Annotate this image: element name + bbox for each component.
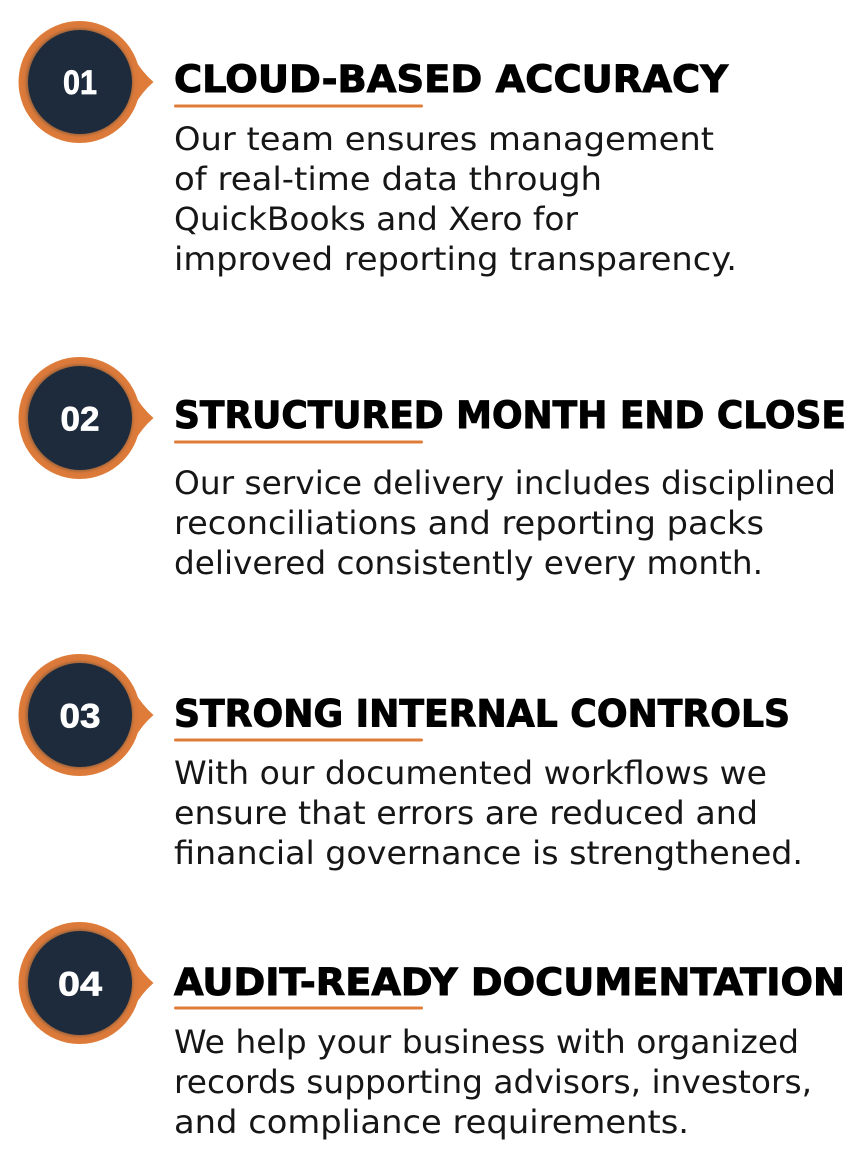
text block: description: financial governance is strengthened. [174,834,803,872]
text block: description: records supporting advisors, investors, [174,1063,812,1101]
heading: structured month end close: STRUCTURED MONTH END CLOSE [174,394,846,437]
panel: item 04 audit-ready documentation [18,922,845,1141]
text block: description [174,120,737,278]
text block: description [174,754,803,872]
text block: description: We help your business with organized [174,1023,799,1061]
heading underline [174,440,423,444]
text block: description: Our service delivery includes disciplined [174,464,836,502]
heading: cloud-based accuracy: CLOUD-BASED ACCURACY [174,58,729,101]
text block: description [174,1023,812,1141]
panel: item 03 strong internal controls [18,654,803,872]
text block: description: and compliance requirements. [174,1103,689,1141]
heading: audit-ready documentation: AUDIT-READY DOCUMENTATION [174,961,845,1004]
text block: description: QuickBooks and Xero for [174,200,579,238]
text block: description: delivered consistently every month. [174,544,763,582]
text block: description: Our team ensures management [174,120,714,158]
text block: description: improved reporting transparency. [174,240,737,278]
heading underline [174,1006,423,1010]
icon: number badge 02 [18,357,154,479]
text block: description: of real-time data through [174,160,602,198]
icon: number badge 01: 01 [63,64,97,102]
panel: item 01 cloud-based accuracy [18,21,737,278]
text block: description: reconciliations and reporting packs [174,504,764,542]
icon: number badge 03 [18,654,154,776]
heading underline [174,738,423,742]
heading: strong internal controls: STRONG INTERNAL CONTROLS [174,692,790,736]
panel: item 02 structured month end close [18,357,846,582]
text block: description: ensure that errors are reduced and [174,794,758,832]
text block: description: With our documented workflows we [174,754,767,792]
icon: number badge 03: 03 [60,698,100,736]
text block: description [174,464,836,582]
icon: number badge 01 [18,21,154,143]
icon: number badge 04 [18,922,154,1044]
icon: number badge 02: 02 [60,400,100,438]
heading underline [174,104,423,108]
icon: number badge 04: 04 [58,966,102,1004]
